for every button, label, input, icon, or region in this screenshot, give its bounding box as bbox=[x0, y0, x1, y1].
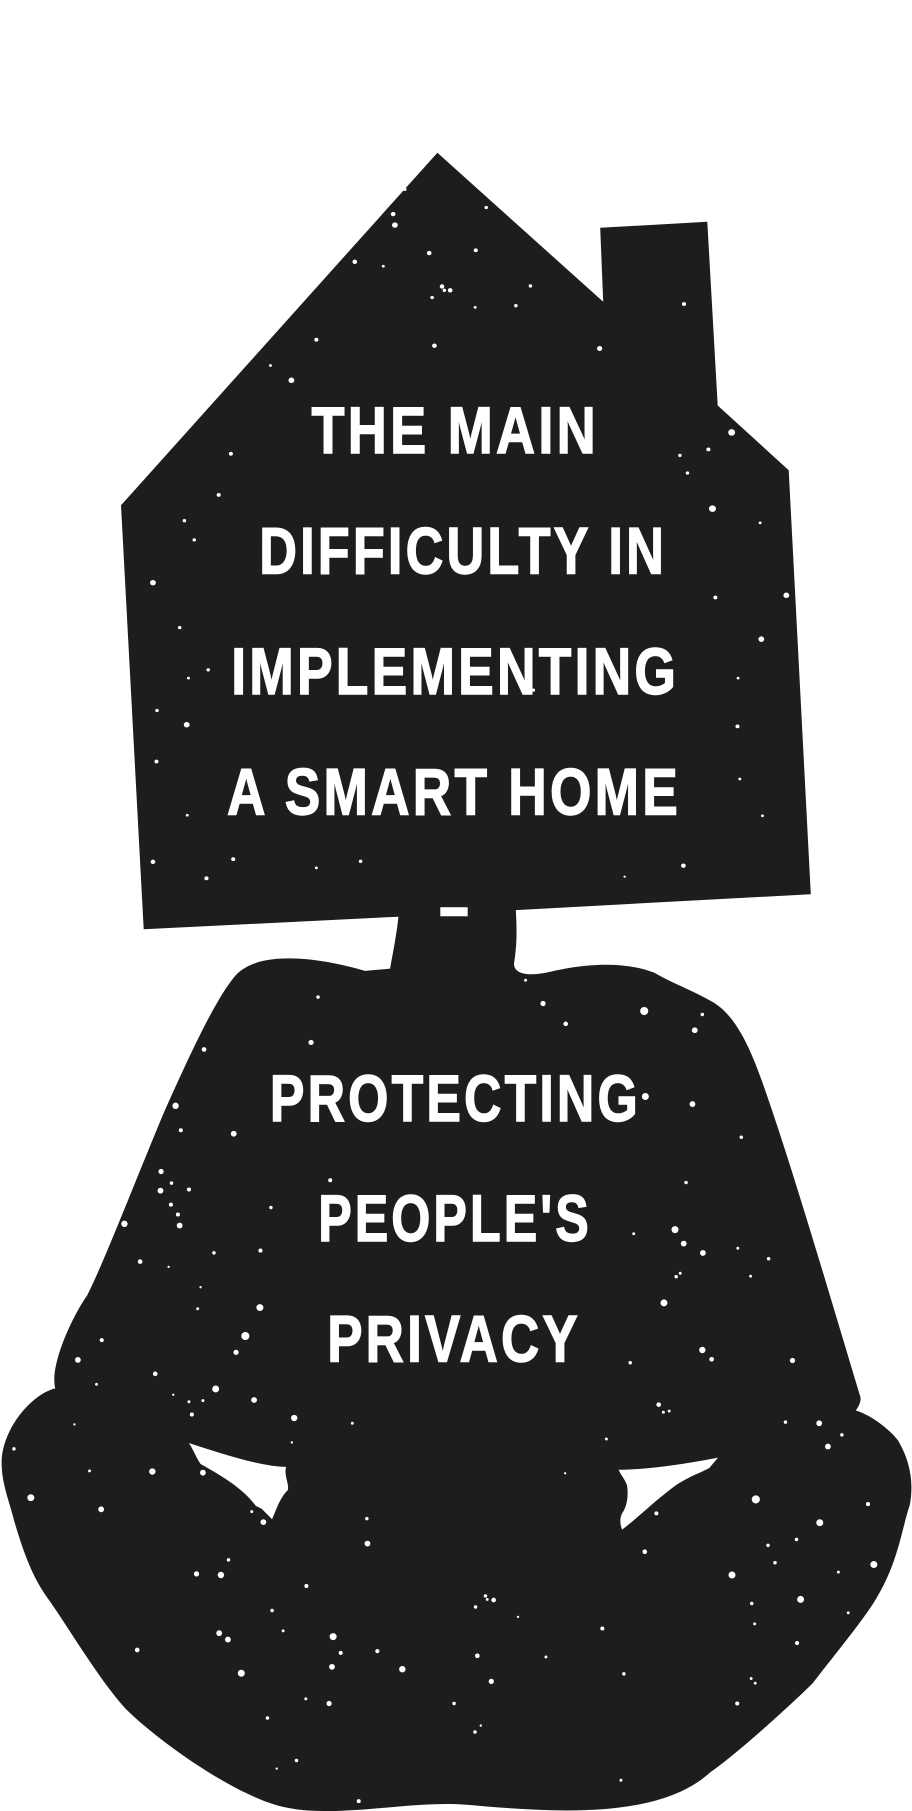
headline text bbox=[227, 393, 681, 1376]
specks on house bbox=[150, 188, 789, 880]
figure body and neck bbox=[2, 909, 911, 1811]
right arm gap bbox=[619, 1458, 718, 1530]
left arm gap bbox=[189, 1443, 288, 1519]
headline line 3: IMPLEMENTING bbox=[231, 634, 679, 708]
headline line 1: THE MAIN bbox=[312, 393, 599, 467]
headline line 2: DIFFICULTY IN bbox=[259, 514, 667, 588]
specks on figure bbox=[12, 979, 877, 1803]
headline line 7: PRIVACY bbox=[327, 1302, 581, 1376]
house silhouette with chimney bbox=[121, 153, 811, 929]
seated figure silhouette bbox=[2, 909, 911, 1811]
headline line 6: PEOPLE'S bbox=[318, 1181, 592, 1255]
dash separator: – bbox=[440, 870, 468, 944]
headline line 5: PROTECTING bbox=[270, 1061, 641, 1135]
headline line 4: A SMART HOME bbox=[227, 754, 681, 828]
